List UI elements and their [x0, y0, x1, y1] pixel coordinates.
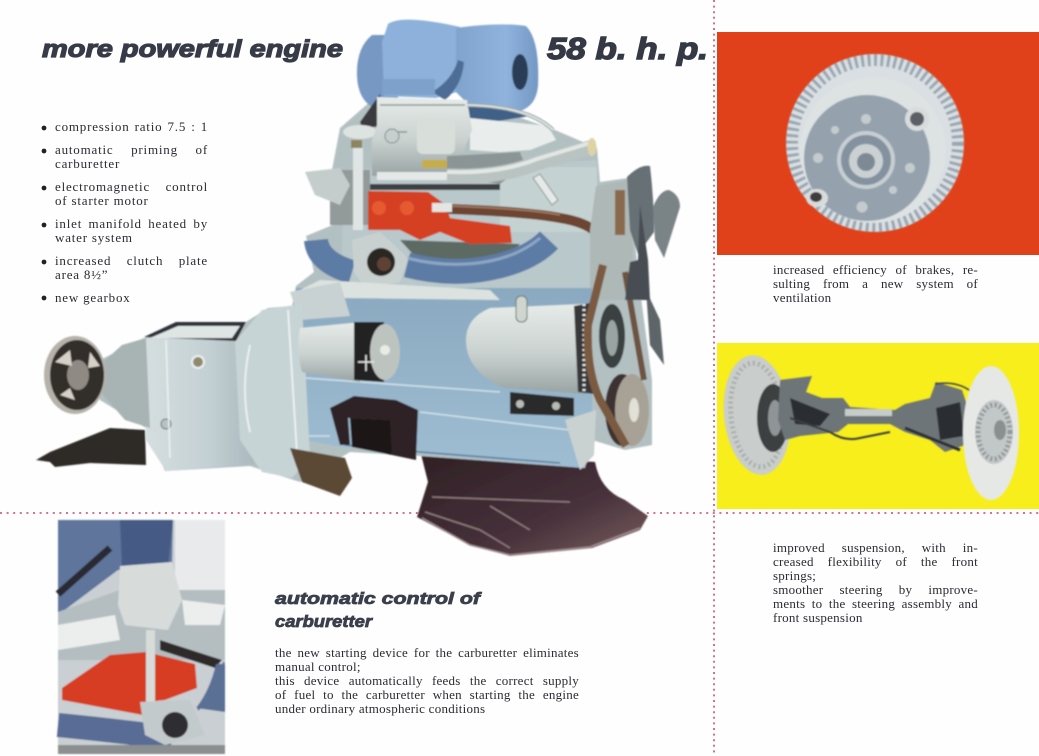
breather pipe: [447, 147, 593, 176]
exhaust tube: [407, 240, 549, 271]
text block: carburetter description: this device automatically feeds the correct supply: [275, 673, 579, 688]
silver engine surround: [58, 590, 225, 660]
text block: feature list: inlet manifold heated by: [55, 216, 208, 231]
caption: brakes: ventilation: [773, 290, 831, 305]
dotted divider: vertical: [713, 0, 715, 756]
text block: feature list: electromagnetic control: [55, 179, 208, 194]
dark plate: [160, 640, 222, 668]
cylinder head: [340, 160, 600, 290]
text block: feature list: increased clutch plate: [55, 253, 208, 268]
caption: suspension and steering: springs;: [773, 568, 816, 583]
caption: suspension and steering: front suspension: [773, 610, 863, 625]
carburetter body: [118, 562, 182, 630]
clutch housing neck: [100, 338, 150, 428]
upper pipes: [300, 280, 500, 300]
icon: ventilated brake drum: [786, 54, 964, 232]
water hose: [450, 209, 596, 232]
caption: brakes: increased efficiency of brakes, re-: [773, 262, 978, 277]
carburetter: [372, 97, 472, 176]
panel: yellow suspension: [717, 343, 1039, 509]
text block: carburetter description: of fuel to the carburetter when starting the engine: [275, 687, 579, 702]
title: 58 b. h. p.: 58 b. h. p.: [547, 31, 708, 66]
dark engine mount: [330, 396, 418, 460]
red inlet manifold: [368, 191, 512, 244]
right of carburetter: open area: [470, 118, 556, 152]
title: more powerful engine: more powerful engine: [42, 36, 343, 63]
text block: feature list: [55, 119, 208, 305]
text block: feature list: water system: [55, 230, 133, 245]
starter motor: [298, 322, 362, 382]
plate: [377, 172, 447, 180]
gearbox mount: [36, 428, 146, 467]
oil pan: [417, 450, 648, 556]
heading: automatic control of carburetter: automatic control of: [275, 589, 483, 608]
bullet markers: [42, 126, 46, 300]
suspension arms: [778, 376, 972, 452]
text block: feature list: new gearbox: [55, 290, 131, 305]
water pump pulley: [599, 304, 625, 368]
clutch disc: [44, 336, 106, 414]
dotted divider: horizontal: [0, 512, 1039, 514]
text block: feature list: area 8½”: [55, 267, 108, 282]
dynamo bracket: [510, 392, 574, 416]
heading: automatic control of carburetter: carburetter: [275, 612, 373, 631]
fuel line: [467, 105, 553, 130]
caption: brakes: [773, 262, 978, 305]
caption: suspension and steering: smoother steering by improve-: [773, 582, 978, 597]
fan belt: [588, 265, 626, 446]
text block: carburetter description: manual control;: [275, 659, 361, 674]
text block: carburetter description: [275, 645, 579, 716]
brass fitting: [422, 160, 448, 168]
bellhousing: [235, 304, 310, 478]
caption: suspension and steering: [773, 540, 978, 625]
crank pulley: [605, 374, 639, 446]
text block: carburetter description: under ordinary atmospheric conditions: [275, 701, 485, 716]
timing cover: [590, 180, 640, 300]
red manifold: [62, 652, 148, 716]
panel: red brake drum: [717, 32, 1039, 255]
caption: brakes: sulting from a new system of: [773, 276, 978, 291]
blue tubes: [58, 725, 172, 738]
right tyre: [963, 366, 1019, 500]
illustration: engine: [36, 20, 680, 556]
distributor linkage: [305, 168, 350, 205]
left tyre: [718, 352, 796, 478]
flange: [140, 700, 205, 745]
icon: front suspension assembly: [718, 352, 1019, 500]
text block: feature list: carburetter: [55, 156, 120, 171]
air cleaner: [357, 20, 538, 128]
rear engine bracket: [290, 448, 352, 496]
caption: suspension and steering: ments to the steering assembly and: [773, 596, 978, 611]
text block: carburetter description: the new starting device for the carburetter eliminates: [275, 645, 579, 660]
text block: feature list: compression ratio 7.5 : 1: [55, 119, 208, 134]
gearbox: [142, 338, 254, 471]
text block: feature list: automatic priming of: [55, 142, 208, 157]
text block: feature list: of starter motor: [55, 193, 149, 208]
caption: suspension and steering: creased flexibility of the front: [773, 554, 978, 569]
engine block: [296, 288, 592, 468]
engine silhouette backing: [100, 100, 652, 482]
oil filler rod: [343, 125, 377, 139]
photo: carburetter close-up: [58, 520, 225, 754]
dynamo: [466, 304, 586, 394]
fan blades: [627, 166, 654, 254]
heading: automatic control of carburetter: [275, 589, 483, 631]
caption: suspension and steering: improved suspension, with in-: [773, 540, 978, 555]
exhaust flange: [352, 232, 408, 288]
